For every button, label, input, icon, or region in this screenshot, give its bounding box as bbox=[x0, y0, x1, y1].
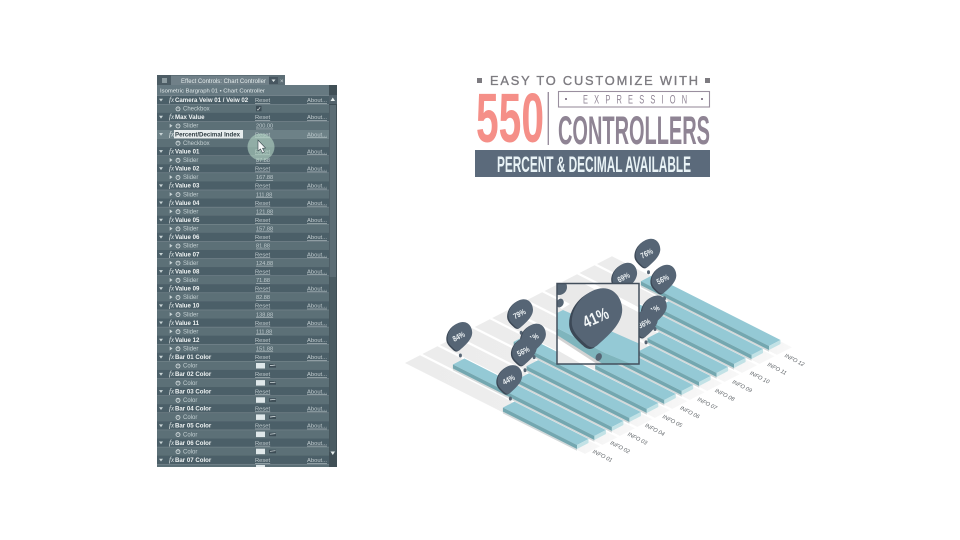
control: max value: Reset bbox=[255, 115, 271, 121]
control: value 09: Slider bbox=[183, 295, 198, 301]
bar 04 bbox=[527, 360, 641, 424]
control: bar 05 color: Bar 05 Color bbox=[175, 423, 212, 430]
control: bar 03 color: Color bbox=[183, 398, 197, 404]
control: bar 07 color: About... bbox=[307, 458, 327, 464]
control: value 05: About... bbox=[307, 218, 327, 224]
bar labels bbox=[591, 353, 806, 464]
control: bar 05 color: About... bbox=[307, 424, 327, 430]
control: value 04: Value 04 bbox=[175, 200, 200, 207]
control: value 08: Slider bbox=[183, 278, 198, 284]
control: value 03: Slider bbox=[183, 192, 198, 198]
control: percent decimal index: Percent/Decimal Index bbox=[175, 131, 241, 138]
control: value 10: fx bbox=[169, 302, 175, 310]
control: value 06: About... bbox=[307, 235, 327, 241]
control: value 01 bbox=[159, 147, 327, 164]
control: value 06: 81.88 bbox=[256, 244, 270, 250]
pin: 56% bar 03: 56% bbox=[515, 344, 532, 359]
bar labels: INFO 03 bbox=[626, 432, 649, 447]
control: value 10: 138.88 bbox=[256, 312, 273, 318]
pin: 61% bbox=[520, 324, 546, 359]
bar 12 bbox=[641, 275, 780, 352]
control: max value: Slider bbox=[183, 124, 198, 130]
control: camera view: fx bbox=[169, 96, 175, 104]
control: bar 01 color: fx bbox=[169, 353, 175, 361]
control: value 04: 121.88 bbox=[256, 209, 273, 215]
pin: 44%: 44% bbox=[501, 372, 517, 387]
control: value 12: 151.88 bbox=[256, 346, 273, 352]
control: bar 05 color: fx bbox=[169, 422, 175, 430]
control: value 08: 71.88 bbox=[256, 278, 270, 284]
control: bar 02 color: Color bbox=[183, 381, 197, 387]
control: value 08: About... bbox=[307, 269, 327, 275]
panel row stripes bbox=[157, 96, 329, 468]
bar 05 bbox=[514, 336, 658, 415]
bar 03 bbox=[518, 373, 623, 433]
control: bar 07 color: fx bbox=[169, 456, 175, 464]
big number 550: 550 bbox=[476, 79, 544, 157]
control: camera view: About... bbox=[307, 98, 327, 104]
expression box: EXPRESSION bbox=[583, 94, 687, 107]
control: bar 01 color bbox=[159, 353, 327, 370]
control: bar 06 color: Bar 06 Color bbox=[175, 440, 212, 447]
control: value 03: 111.88 bbox=[256, 192, 272, 198]
control: bar 05 color: Reset bbox=[255, 424, 271, 430]
pin: 61%: 61% bbox=[524, 331, 541, 345]
control: percent decimal index bbox=[159, 130, 327, 147]
control: bar 04 color bbox=[159, 404, 327, 421]
control: bar 07 color bbox=[159, 456, 327, 467]
control: value 10: Value 10 bbox=[175, 303, 200, 310]
control: value 12: Reset bbox=[255, 338, 271, 344]
vertical separator bbox=[548, 92, 549, 145]
control: bar 01 color: Color bbox=[183, 364, 197, 370]
pin: 56% bar 03 bbox=[511, 337, 537, 372]
control: value 10: Reset bbox=[255, 304, 271, 310]
control: value 12: Slider bbox=[183, 346, 198, 352]
control: bar 04 color: Bar 04 Color bbox=[175, 406, 212, 412]
control: value 08: fx bbox=[169, 267, 175, 275]
scrollbar bbox=[329, 85, 337, 467]
control: bar 02 color: About... bbox=[307, 372, 327, 378]
bar labels: INFO 01 bbox=[591, 449, 613, 464]
control: value 11 bbox=[159, 319, 327, 335]
control: max value bbox=[159, 113, 327, 130]
control: max value: About... bbox=[307, 115, 327, 121]
control: bar 07 color: Bar 07 Color bbox=[175, 457, 212, 464]
control: bar 06 color: fx bbox=[169, 439, 175, 447]
bar 02 bbox=[453, 358, 606, 442]
panel tab strip bbox=[157, 75, 285, 85]
pin: 69% bbox=[611, 263, 637, 298]
control: value 07: 124.88 bbox=[256, 261, 273, 267]
control: bar 02 color: fx bbox=[169, 370, 175, 378]
control: value 05: Value 05 bbox=[175, 217, 200, 224]
control: bar 01 color: Bar 01 Color bbox=[175, 354, 212, 361]
bar labels: INFO 06 bbox=[679, 406, 701, 421]
pin: 41% bar 09 bbox=[641, 296, 667, 331]
control: value 01: 87.88 bbox=[256, 158, 270, 164]
bar labels: INFO 12 bbox=[783, 353, 806, 369]
control: value 10 bbox=[159, 302, 327, 318]
control: value 03: Reset bbox=[255, 184, 271, 190]
control: bar 05 color: Color bbox=[183, 432, 197, 438]
control: value 06: Value 06 bbox=[175, 234, 200, 241]
pin: 56% bar 11 bbox=[650, 265, 676, 300]
control: bar 03 color: About... bbox=[307, 389, 327, 395]
bar 07 bbox=[577, 332, 693, 397]
banner bbox=[475, 150, 710, 177]
control: value 11: Slider bbox=[183, 329, 198, 335]
control: value 10: About... bbox=[307, 304, 327, 310]
control: bar 04 color: fx bbox=[169, 404, 175, 412]
pin: 41% bar 09: 41% bbox=[645, 302, 662, 317]
title block bbox=[475, 73, 710, 177]
control: value 01: Reset bbox=[255, 149, 271, 155]
bar 01 bbox=[503, 402, 588, 451]
control: value 03 bbox=[159, 182, 327, 198]
pin: 36% bbox=[632, 309, 658, 344]
floor stripes bbox=[405, 256, 792, 454]
pin: 36%: 36% bbox=[636, 316, 653, 331]
isometric bar chart bbox=[405, 239, 806, 464]
control: value 12: Value 12 bbox=[175, 337, 200, 344]
bar 11 bbox=[657, 301, 763, 361]
control: bar 06 color: Color bbox=[183, 449, 197, 455]
control: bar 04 color: Color bbox=[183, 415, 197, 421]
control: value 09 bbox=[159, 284, 327, 301]
control: max value: Max Value bbox=[175, 114, 205, 121]
expression box bbox=[558, 92, 710, 107]
control: value 09: About... bbox=[307, 286, 327, 292]
bar 06 bbox=[595, 359, 676, 406]
control: value 10: Slider bbox=[183, 312, 198, 318]
control: value 05: fx bbox=[169, 216, 175, 224]
control: value 03: Value 03 bbox=[175, 183, 200, 190]
panel breadcrumb row: Isometric Bargraph 01 • Chart Controller bbox=[160, 89, 265, 95]
control: value 04: About... bbox=[307, 201, 327, 207]
control: value 02: Reset bbox=[255, 167, 271, 173]
control: value 05 bbox=[159, 216, 327, 233]
pin: 79%: 79% bbox=[511, 306, 528, 321]
control: value 12: fx bbox=[169, 336, 175, 344]
bar labels: INFO 11 bbox=[766, 362, 787, 377]
control: value 05: 157.88 bbox=[256, 227, 273, 233]
control: value 01: Value 01 bbox=[175, 148, 200, 155]
zoom callout box bbox=[556, 282, 640, 365]
heading: easy to customize with: EASY TO CUSTOMIZE WITH bbox=[490, 73, 698, 88]
control: bar 03 color: fx bbox=[169, 387, 175, 395]
control: bar 01 color: About... bbox=[307, 355, 327, 361]
box frame bbox=[557, 284, 639, 364]
control: bar 01 color: Reset bbox=[255, 355, 271, 361]
panel breadcrumb row bbox=[157, 85, 337, 96]
bar labels: INFO 05 bbox=[661, 414, 684, 430]
control: percent decimal index: fx bbox=[169, 130, 175, 138]
control: value 09: 82.88 bbox=[256, 295, 270, 301]
control: camera view: Camera Veiw 01 / Veiw 02 bbox=[175, 97, 249, 104]
control: value 07: Slider bbox=[183, 261, 198, 267]
control: value 07: About... bbox=[307, 252, 327, 258]
control: bar 02 color: Bar 02 Color bbox=[175, 371, 212, 378]
control: bar 03 color: Reset bbox=[255, 389, 271, 395]
control: percent decimal index: About... bbox=[307, 132, 327, 138]
control: value 11: About... bbox=[307, 321, 327, 327]
banner: PERCENT & DECIMAL AVAILABLE bbox=[497, 152, 691, 177]
control: value 12: About... bbox=[307, 338, 327, 344]
control: value 11: Reset bbox=[255, 321, 271, 327]
control: value 06: fx bbox=[169, 233, 175, 241]
pin: 76%: 76% bbox=[639, 246, 655, 261]
control: bar 04 color: Reset bbox=[255, 406, 271, 412]
control: value 11: Value 11 bbox=[175, 320, 200, 327]
bar labels: INFO 02 bbox=[609, 440, 631, 456]
control: max value: 200.00 bbox=[256, 124, 273, 130]
control: value 04: Slider bbox=[183, 209, 198, 215]
control: value 05: Slider bbox=[183, 227, 198, 233]
control: bar 03 color bbox=[159, 387, 327, 404]
control: max value: fx bbox=[169, 113, 175, 121]
bar labels: INFO 04 bbox=[644, 423, 665, 438]
control: camera view: Checkbox bbox=[183, 107, 210, 113]
control: value 02: Value 02 bbox=[175, 166, 200, 173]
control: bar 06 color: About... bbox=[307, 441, 327, 447]
bar 08 bbox=[638, 345, 711, 388]
control: camera view: ✓ bbox=[256, 107, 261, 113]
control: percent decimal index: Checkbox bbox=[183, 141, 210, 147]
pin: 84%: 84% bbox=[451, 329, 467, 344]
control: value 09: Value 09 bbox=[175, 286, 200, 292]
control: value 04: fx bbox=[169, 199, 175, 207]
control: value 07: fx bbox=[169, 250, 175, 258]
control: value 03: fx bbox=[169, 182, 175, 190]
bar 10 bbox=[618, 299, 746, 370]
panel tab strip: × bbox=[280, 79, 284, 85]
control: value 06: Reset bbox=[255, 235, 271, 241]
control: bar 02 color bbox=[159, 370, 327, 387]
control: camera view bbox=[159, 96, 327, 112]
control: camera view: Reset bbox=[255, 98, 271, 104]
control: value 02: fx bbox=[169, 165, 175, 173]
bar 09 bbox=[648, 332, 728, 379]
control: value 01: About... bbox=[307, 149, 327, 155]
pin: 56% bar 11: 56% bbox=[655, 272, 671, 287]
control: bar 06 color bbox=[159, 439, 327, 455]
control: percent decimal index: Reset bbox=[255, 132, 271, 138]
zoom callout box: 41% bbox=[580, 304, 612, 332]
control: bar 02 color: Reset bbox=[255, 372, 271, 378]
control: value 05: Reset bbox=[255, 218, 271, 224]
control: value 06: Slider bbox=[183, 244, 198, 250]
pin: 84% bbox=[446, 322, 472, 358]
control: value 08: Value 08 bbox=[175, 268, 200, 275]
control: value 07: Value 07 bbox=[175, 251, 200, 258]
control: value 06 bbox=[159, 233, 327, 250]
control: value 01: Slider bbox=[183, 158, 198, 164]
control: bar 06 color: Reset bbox=[255, 441, 271, 447]
control: value 08: Reset bbox=[255, 269, 271, 275]
control: bar 07 color: Reset bbox=[255, 458, 271, 464]
bar labels: INFO 10 bbox=[748, 371, 771, 386]
control: value 02: 167.88 bbox=[256, 175, 273, 181]
control: value 12 bbox=[159, 336, 327, 352]
pin: 79% bbox=[507, 299, 533, 335]
cursor highlight bbox=[248, 134, 274, 160]
control: bar 03 color: Bar 03 Color bbox=[175, 388, 212, 395]
control: value 08 bbox=[159, 267, 327, 284]
control: value 01: fx bbox=[169, 147, 175, 155]
control: value 07: Reset bbox=[255, 252, 271, 258]
control: value 11: fx bbox=[169, 319, 175, 327]
control: value 02: About... bbox=[307, 167, 327, 173]
highlighted row bbox=[157, 130, 329, 139]
control: value 09: fx bbox=[169, 284, 175, 292]
panel: effect controls bbox=[157, 75, 337, 468]
pin: 44% bbox=[496, 365, 522, 401]
panel tab strip: Effect Controls: Chart Controller bbox=[181, 79, 266, 85]
bar labels: INFO 08 bbox=[714, 388, 736, 403]
bar labels: INFO 07 bbox=[696, 397, 718, 412]
control: value 02: Slider bbox=[183, 175, 198, 181]
text: CONTROLLERS bbox=[558, 109, 710, 153]
pin: 69%: 69% bbox=[616, 270, 632, 285]
pin: 76% bbox=[634, 239, 660, 274]
control: value 04 bbox=[159, 199, 327, 215]
control: value 04: Reset bbox=[255, 201, 271, 207]
control: value 02 bbox=[159, 165, 327, 181]
control: value 11: 111.88 bbox=[256, 329, 272, 335]
control: bar 05 color bbox=[159, 422, 327, 438]
bar labels: INFO 09 bbox=[731, 379, 753, 394]
control: value 09: Reset bbox=[255, 286, 271, 292]
control: bar 04 color: About... bbox=[307, 406, 327, 412]
control: value 03: About... bbox=[307, 184, 327, 190]
control: value 07 bbox=[159, 250, 327, 267]
